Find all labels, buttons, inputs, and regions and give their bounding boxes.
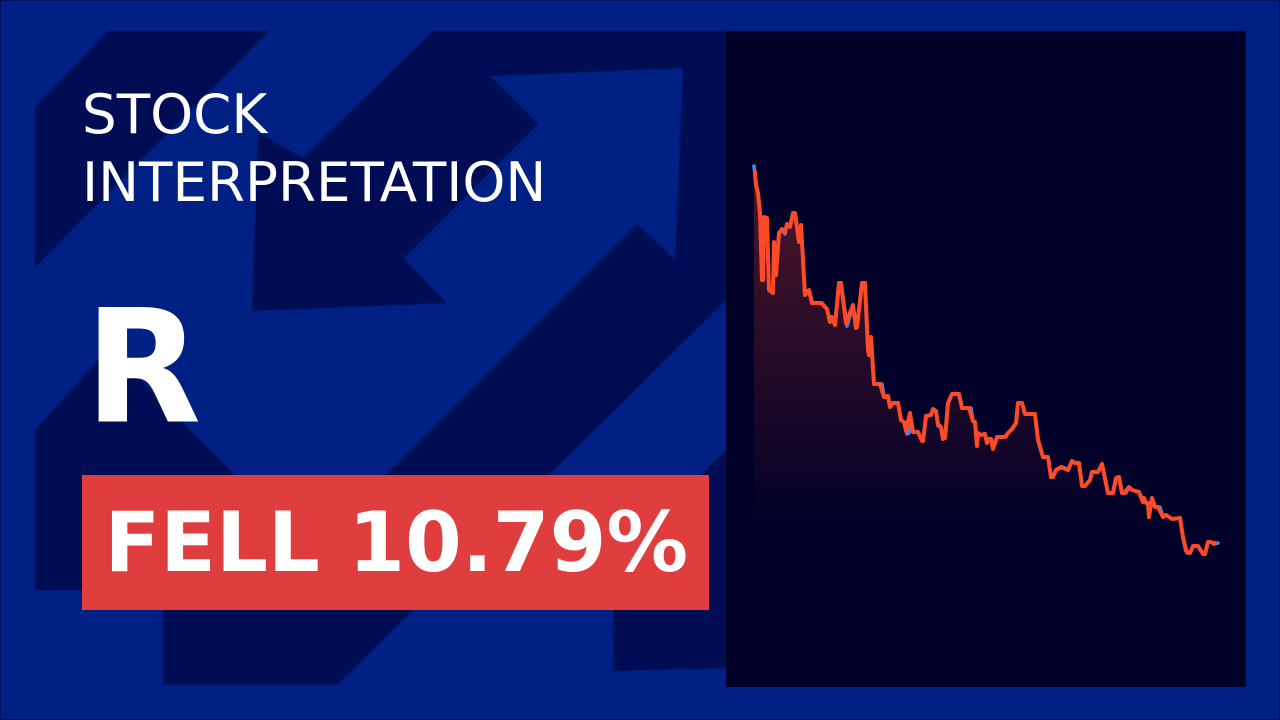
ticker symbol: R [85, 277, 201, 459]
title: STOCK [82, 82, 269, 146]
title second line: INTERPRETATION [82, 150, 546, 214]
area under the price line [754, 166, 1218, 554]
change badge: FELL 10.79% [104, 495, 688, 591]
blue price line [754, 166, 1218, 554]
change badge [82, 475, 709, 610]
chart panel [726, 31, 1246, 687]
background arrows [35, 31, 726, 685]
red price line [755, 172, 1215, 554]
